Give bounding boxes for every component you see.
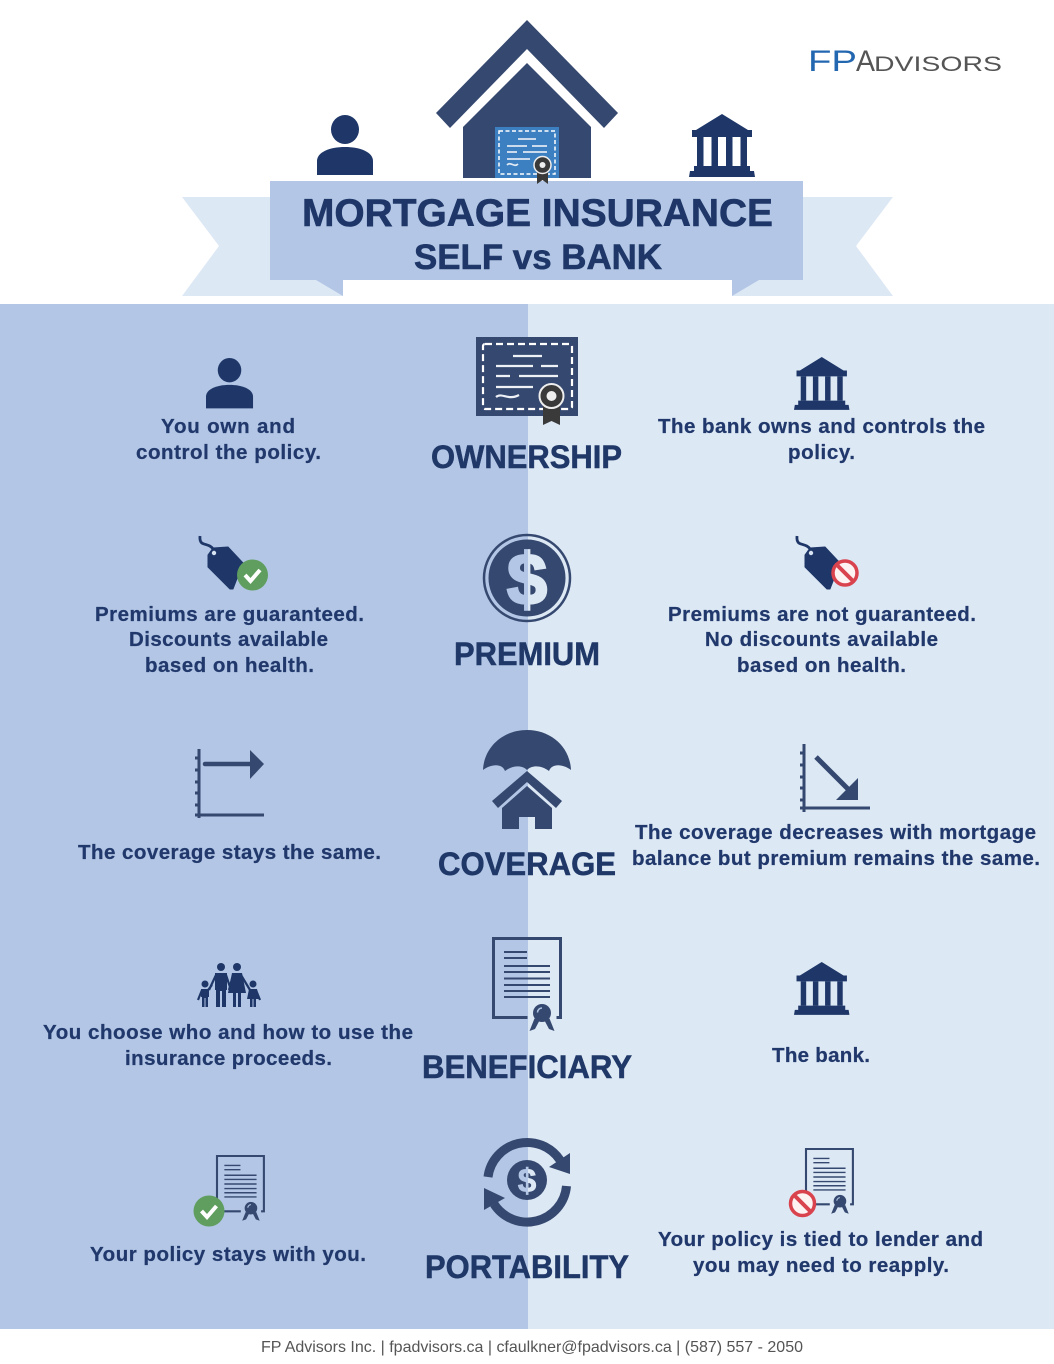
text: self ownership: control the policy.: [136, 441, 321, 464]
text: bank ownership: [658, 415, 985, 464]
icon: policy document: [494, 938, 560, 1031]
heading: beneficiary: BENEFICIARY: [422, 1049, 632, 1085]
icon: header bank: [689, 114, 755, 177]
text: self ownership: [136, 415, 321, 464]
row: coverage: [78, 730, 1040, 882]
row: ownership: [136, 337, 985, 475]
background panel: self: [0, 304, 528, 1329]
text: bank portability: you may need to reapply.: [693, 1254, 949, 1277]
text: self beneficiary: insurance proceeds.: [125, 1047, 332, 1070]
text: bank premium: [668, 603, 976, 677]
heading: coverage: COVERAGE: [438, 846, 616, 882]
row: premium: [95, 535, 976, 677]
icon: dollar coin: $: [507, 540, 547, 620]
subtitle: SELF vs BANK: [414, 238, 662, 277]
icon: person: [206, 358, 253, 408]
text: self portability: Your policy stays with you.: [90, 1243, 366, 1266]
text: bank premium: Premiums are not guaranteed.: [668, 603, 976, 626]
text: bank coverage: [632, 821, 1040, 870]
icon: document with prohibition: [790, 1149, 853, 1216]
text: self beneficiary: [43, 1021, 413, 1070]
logo: FP Advisors: DVISORS: [874, 53, 1002, 76]
text: bank premium: based on health.: [737, 654, 906, 677]
icon: dollar cycle arrows: $: [518, 1162, 536, 1199]
text: bank beneficiary: The bank.: [772, 1044, 870, 1067]
text: self premium: Discounts available: [129, 628, 328, 651]
text: self ownership: You own and: [161, 415, 295, 438]
text: bank portability: [658, 1228, 983, 1277]
icon: bank: [794, 357, 849, 410]
icon: tag with prohibition: [797, 536, 857, 589]
icon: house with policy certificate: [436, 20, 618, 184]
icon: bank: [794, 962, 849, 1015]
text: self premium: [95, 603, 364, 677]
text: self beneficiary: You choose who and how to use the: [43, 1021, 413, 1044]
icon: umbrella over house: [483, 730, 571, 829]
text: self coverage: The coverage stays the same.: [78, 841, 381, 864]
title: MORTGAGE INSURANCE: [302, 192, 773, 235]
logo: FP Advisors: FP: [808, 45, 857, 78]
text: bank ownership: policy.: [788, 441, 855, 464]
icon: header person: [317, 115, 373, 175]
text: bank coverage: The coverage decreases with mortgage: [635, 821, 1036, 844]
icon: document with check: [194, 1156, 264, 1226]
icon: certificate: [476, 337, 578, 425]
icon: family: [198, 963, 260, 1007]
icon: declining coverage chart: [800, 744, 870, 812]
text: self premium: Premiums are guaranteed.: [95, 603, 364, 626]
heading: portability: PORTABILITY: [425, 1249, 629, 1285]
footer contact line: FP Advisors Inc. | fpadvisors.ca | cfaulkner@fpadvisors.ca | (587) 557 - 2050: [261, 1339, 803, 1356]
heading: ownership: OWNERSHIP: [431, 439, 622, 475]
heading: premium: PREMIUM: [454, 636, 600, 672]
icon: tag with check: [200, 536, 268, 590]
text: bank ownership: The bank owns and controls the: [658, 415, 985, 438]
title ribbon: [182, 181, 893, 296]
text: bank portability: Your policy is tied to lender and: [658, 1228, 983, 1251]
icon: flat coverage chart: [195, 749, 264, 818]
text: bank coverage: balance but premium remains the same.: [632, 847, 1040, 870]
icon: dollar coin: [484, 535, 570, 621]
text: bank premium: No discounts available: [705, 628, 938, 651]
icon: dollar cycle arrows: [484, 1142, 570, 1222]
background panel: bank: [528, 304, 1054, 1329]
row: beneficiary: [43, 938, 870, 1085]
text: self premium: based on health.: [145, 654, 314, 677]
logo: FP Advisors: A: [856, 45, 875, 78]
logo: FP Advisors: [808, 45, 1002, 78]
row: portability: [90, 1142, 983, 1285]
